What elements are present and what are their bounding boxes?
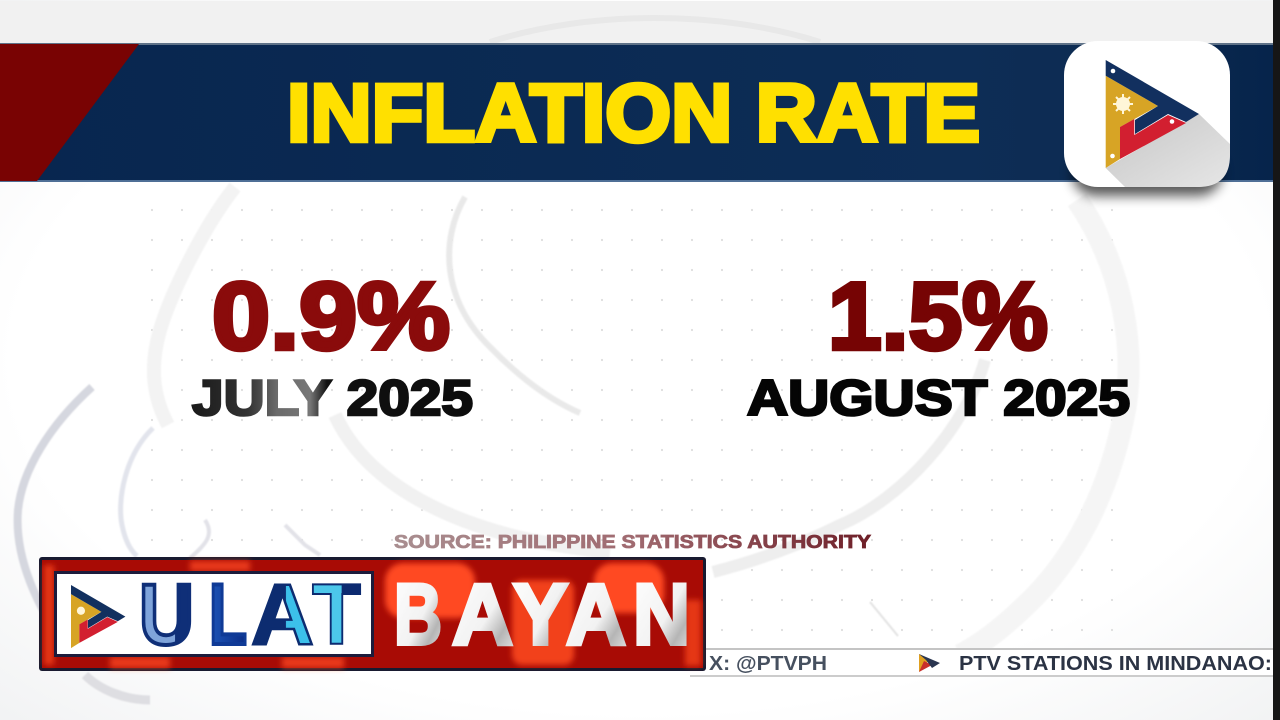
label August 2025: AUGUST 2025 bbox=[747, 370, 1130, 426]
banner red corner bbox=[0, 44, 139, 181]
logo long shadow bbox=[1106, 114, 1230, 187]
wordmark BAYAN: B bbox=[394, 567, 442, 663]
icon: small PTV logo bbox=[71, 585, 125, 648]
value 1.5%: 1.5% bbox=[828, 263, 1048, 370]
bokeh lights bbox=[44, 561, 701, 668]
ticker text: PTV STATIONS IN MINDANAO: bbox=[959, 653, 1272, 675]
wordmark BAYAN: A bbox=[566, 567, 626, 663]
wordmark ULAT bbox=[139, 567, 361, 663]
value 0.9%: 0.9% bbox=[212, 263, 450, 370]
icon: ticker logo bbox=[919, 654, 940, 672]
wordmark BAYAN: Y bbox=[513, 567, 568, 663]
wordmark ULAT: T bbox=[312, 567, 361, 663]
PTV logo badge bbox=[1064, 41, 1230, 196]
title banner bbox=[0, 43, 1273, 182]
icon: PTV triangle logo bbox=[1106, 60, 1199, 168]
stat: July 2025 bbox=[192, 263, 473, 426]
stat: August 2025 bbox=[747, 263, 1130, 426]
wordmark BAYAN: N bbox=[633, 567, 690, 663]
right black edge bbox=[1273, 0, 1280, 720]
wordmark ULAT: U bbox=[139, 567, 194, 663]
top light band bbox=[0, 1, 1273, 43]
news ticker bbox=[690, 648, 1273, 677]
wordmark ULAT: L bbox=[209, 567, 247, 663]
wordmark ULAT: A bbox=[251, 567, 314, 663]
wordmark BAYAN bbox=[394, 567, 690, 663]
wordmark BAYAN: A bbox=[452, 567, 513, 663]
ticker handle: X: @PTVPH bbox=[709, 653, 827, 675]
source line: SOURCE: PHILIPPINE STATISTICS AUTHORITY bbox=[394, 532, 871, 552]
white name plate bbox=[54, 571, 374, 657]
Ulat Bayan lower-third bbox=[39, 557, 706, 671]
label July 2025: JULY 2025 bbox=[192, 370, 473, 426]
title: INFLATION RATE bbox=[287, 68, 980, 159]
